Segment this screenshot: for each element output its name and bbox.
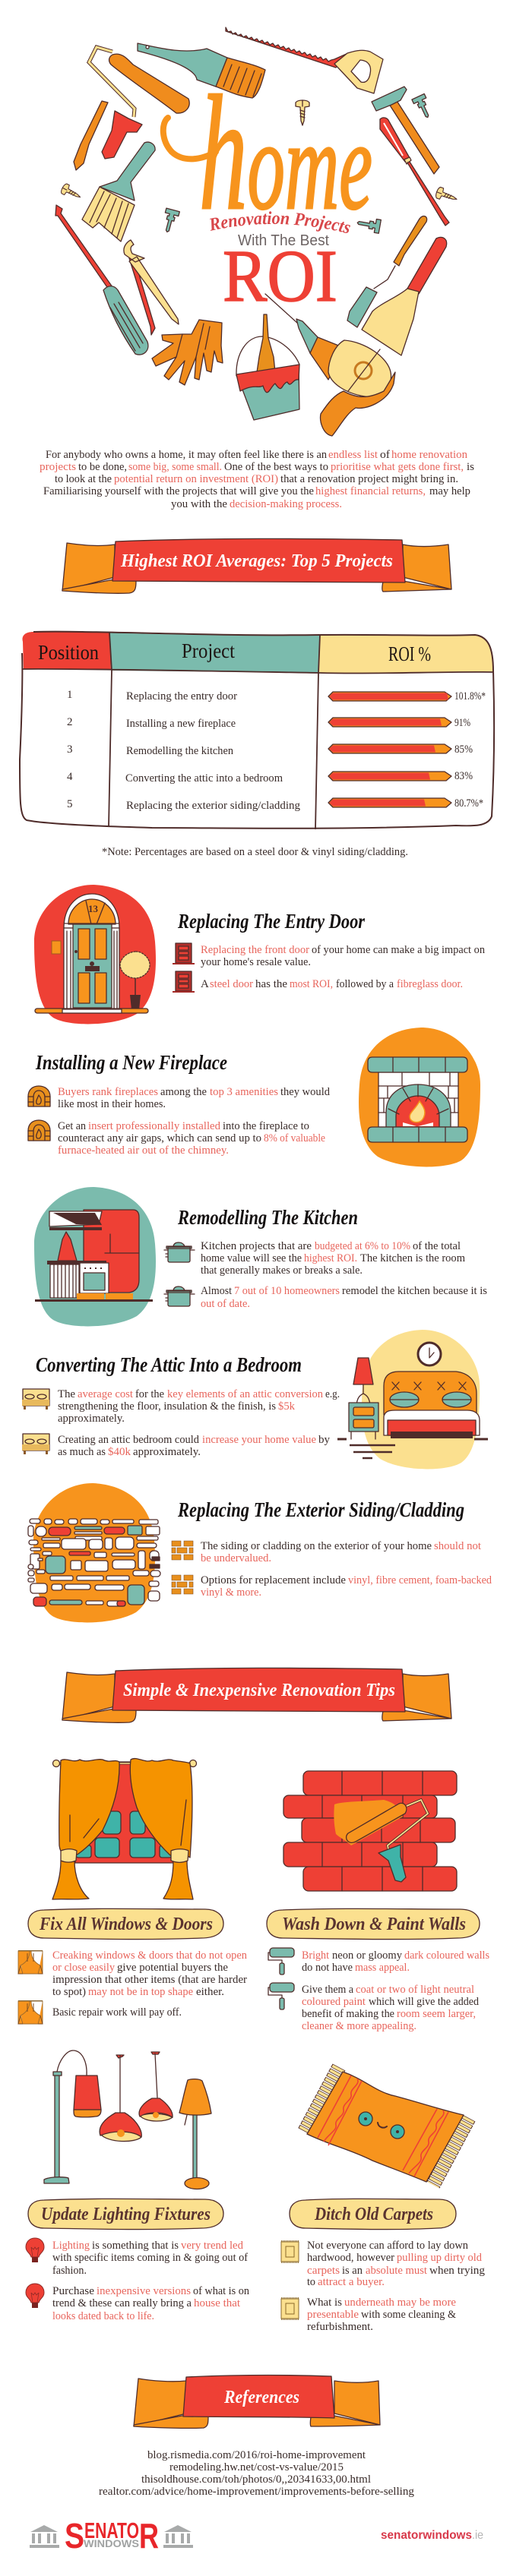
bullet text: increase your home value xyxy=(202,1434,316,1446)
ROI values xyxy=(454,690,486,810)
bullet text: give potential buyers the xyxy=(117,1962,228,1974)
project names: Replacing the entry door xyxy=(126,690,237,702)
title word: home: home xyxy=(199,62,372,244)
bullet text: Kitchen projects that are xyxy=(201,1240,312,1252)
bullet text: mass appeal. xyxy=(355,1962,410,1974)
project names: Replacing the exterior siding/cladding xyxy=(126,800,300,812)
heading: Installing a New Fireplace xyxy=(35,1051,227,1074)
bullet text: presentable xyxy=(307,2309,359,2321)
table footnote: *Note: Percentages are based on a steel door & vinyl siding/cladding. xyxy=(102,846,408,858)
bullet text xyxy=(58,1086,330,1110)
bullet text: is something that is xyxy=(92,2240,179,2252)
bullet text: to xyxy=(307,2276,315,2288)
bullet text: average cost xyxy=(78,1388,134,1400)
pill heading: Update Lighting Fixtures xyxy=(41,2205,211,2224)
references list: remodeling.hw.net/cost-vs-value/2015 xyxy=(169,2461,344,2473)
icon: paint bucket xyxy=(236,314,299,420)
table headings: Position xyxy=(38,641,99,664)
bullet text: The xyxy=(58,1388,75,1400)
bullet text: either. xyxy=(196,1986,224,1998)
bullet text: fibreglass door. xyxy=(397,978,463,990)
bullet text: do not have xyxy=(302,1962,353,1974)
intro text block: decision-making process. xyxy=(230,498,342,510)
icon: curtain xyxy=(18,1950,43,1974)
bullet text: they would xyxy=(280,1086,330,1098)
bullet text: Bright xyxy=(302,1949,330,1962)
bullet text: among the xyxy=(160,1086,207,1098)
bullet text: is an xyxy=(342,2265,363,2277)
icon: fireplace xyxy=(28,1120,50,1141)
bullet text: Purchase xyxy=(52,2285,94,2297)
bullet text: Creating an attic bedroom could xyxy=(58,1434,199,1446)
bullet text: top 3 amenities xyxy=(210,1086,278,1098)
position numbers: 4 xyxy=(67,771,73,783)
position numbers: 1 xyxy=(67,689,73,701)
project names: Converting the attic into a bedroom xyxy=(125,772,283,784)
intro text block xyxy=(40,449,474,510)
bullet text: 8% of valuable xyxy=(264,1132,325,1144)
bullet text: with some cleaning & xyxy=(361,2309,456,2321)
icon: heat gun xyxy=(265,294,395,436)
table headings xyxy=(38,639,431,665)
bullet text: refurbishment. xyxy=(307,2321,373,2333)
logo: Senator Windows: S xyxy=(65,2516,84,2555)
bullet text: underneath may be more xyxy=(344,2297,456,2309)
intro text block: to be done, xyxy=(78,461,127,473)
project names: Remodelling the kitchen xyxy=(126,745,233,757)
illustration: carpet xyxy=(304,2067,469,2185)
intro text block: highest financial returns, xyxy=(315,485,426,497)
illustration: curtains xyxy=(52,1759,196,1899)
bullet text: house that xyxy=(194,2297,241,2309)
banner: Highest ROI Averages xyxy=(62,538,451,593)
bullet text: or close easily xyxy=(52,1962,115,1974)
table headings: Project xyxy=(182,639,235,662)
icon: pot xyxy=(164,1286,195,1306)
bullet text: to spot) xyxy=(52,1986,86,1998)
references list: blog.rismedia.com/2016/roi-home-improvement xyxy=(147,2449,366,2461)
bullet text: furnace-heated air out of the chimney. xyxy=(58,1144,229,1157)
position numbers: 2 xyxy=(67,716,73,728)
intro text block: Familiarising yourself with the projects that will give you the xyxy=(43,485,314,497)
intro text block: home renovation xyxy=(391,449,467,461)
bullet text: room seem larger, xyxy=(397,2008,476,2020)
intro text block: is xyxy=(467,461,474,473)
bullet text: which will give the added xyxy=(369,1996,479,2008)
bullet text xyxy=(201,944,485,968)
intro text block: some big, some small. xyxy=(128,461,222,473)
bullet text: neon or gloomy xyxy=(332,1949,402,1962)
icon: drill bit xyxy=(74,101,108,170)
bullet text: of what is on xyxy=(193,2285,249,2297)
intro text block: of xyxy=(380,449,390,461)
pill heading: Fix All Windows & Doors xyxy=(39,1915,213,1934)
title word: ROI: ROI xyxy=(223,235,337,317)
bullet text: Options for replacement include xyxy=(201,1574,346,1586)
icon: pot xyxy=(164,1242,195,1262)
project names: Installing a new fireplace xyxy=(126,718,236,730)
icon: rug xyxy=(281,2241,299,2262)
intro text block: that a renovation project might bring in. xyxy=(280,473,458,485)
project names xyxy=(125,690,300,812)
header tools illustration xyxy=(55,27,459,436)
bullet text: as much as xyxy=(58,1446,106,1458)
illustration: red door xyxy=(34,885,156,1024)
references list: realtor.com/advice/home-improvement/improvements-before-selling xyxy=(99,2486,414,2498)
bullet text: attract a buyer. xyxy=(318,2276,385,2288)
bullet text: be undervalued. xyxy=(201,1552,271,1564)
bullet text: 7 out of 10 homeowners xyxy=(234,1285,340,1297)
icon: screwdriver left xyxy=(55,205,148,355)
pill heading xyxy=(28,1908,223,1940)
logo: Senator Windows: R xyxy=(139,2516,159,2555)
bullet text xyxy=(52,1949,247,1998)
website link: .ie xyxy=(472,2529,483,2542)
bullet text: steel door xyxy=(210,978,253,990)
bullet text xyxy=(307,2297,456,2333)
bullet text: Get an xyxy=(58,1120,86,1132)
intro text block: may help xyxy=(429,485,470,497)
icon: bricks xyxy=(172,1575,193,1594)
bullet text: carpets xyxy=(307,2265,340,2277)
icon: roller xyxy=(268,1983,294,2009)
icon: chisel xyxy=(347,216,427,327)
bullet text: Not everyone can afford to lay down xyxy=(307,2240,468,2252)
bullet text: should not xyxy=(434,1540,482,1552)
icon: curtain xyxy=(18,2000,43,2024)
intro text block: you with the xyxy=(171,498,227,510)
bullet text: of your home can make a big impact on xyxy=(312,944,485,956)
bullet text: Almost xyxy=(201,1285,233,1297)
bullet text: $5k xyxy=(278,1400,295,1413)
icon: gloves xyxy=(152,320,223,385)
heading: Remodelling The Kitchen xyxy=(177,1206,358,1229)
bullet text: by xyxy=(318,1434,330,1446)
bullet text: home value will see the xyxy=(201,1252,302,1264)
bullet text xyxy=(201,1285,487,1310)
icon: door xyxy=(173,943,195,964)
heading: Converting The Attic Into a Bedroom xyxy=(36,1353,302,1376)
bullet text: A xyxy=(201,978,209,990)
table headings: ROI % xyxy=(388,642,431,665)
icon: red screwdriver xyxy=(380,118,449,226)
bullet text xyxy=(302,1984,479,2032)
title line: Renovation Projects: Renovation Projects xyxy=(210,211,351,233)
icon: fireplace xyxy=(28,1086,50,1106)
illustration: kitchen xyxy=(34,1187,156,1326)
heading: Replacing The Entry Door xyxy=(177,910,365,933)
bullet text: e.g. xyxy=(325,1388,340,1400)
bullet text: looks dated back to life. xyxy=(52,2310,154,2322)
bullet text: coloured paint xyxy=(302,1996,366,2008)
bullet text xyxy=(201,978,463,990)
bullet text xyxy=(201,1240,465,1277)
bullet text: key elements of an attic conversion xyxy=(167,1388,323,1400)
intro text block: prioritise what gets done first, xyxy=(331,461,464,473)
icon: door xyxy=(173,971,195,993)
title line: With The Best: With The Best xyxy=(238,232,329,249)
ROI values: 85% xyxy=(454,743,473,756)
ROI values: 101.8%* xyxy=(454,690,486,702)
intro text block: potential return on investment (ROI) xyxy=(114,473,278,485)
logo: Senator Windows: ENATO xyxy=(84,2519,139,2543)
bullet text xyxy=(302,1949,489,1974)
title word: home xyxy=(163,62,372,244)
bullet text xyxy=(201,1574,492,1599)
icon: roller xyxy=(268,1948,294,1975)
panel: Fix All Windows & Doors xyxy=(18,1759,247,2024)
illustration: bedroom xyxy=(337,1330,488,1469)
references list xyxy=(99,2449,414,2498)
illustration: fireplace xyxy=(359,1028,480,1166)
icon: bed xyxy=(22,1389,49,1410)
title xyxy=(160,62,372,317)
bullet text: vinyl, fibre cement, foam-backed xyxy=(348,1574,492,1586)
icon: bulb xyxy=(26,2238,44,2262)
intro text block: endless list xyxy=(328,449,378,461)
bullet text: for the xyxy=(135,1388,164,1400)
banner: Highest ROI Averages: Highest ROI Averages: Top 5 Projects xyxy=(120,551,393,571)
bullet text xyxy=(58,1388,340,1425)
panel: Installing a New Fireplace xyxy=(28,1028,480,1166)
heading: Replacing The Exterior Siding/Cladding xyxy=(177,1498,464,1521)
bullet text xyxy=(201,1540,482,1564)
banner: Simple & Inexpensive Renovation Tips: Simple & Inexpensive Renovation Tips xyxy=(123,1681,395,1700)
bullet text: budgeted at 6% to 10% xyxy=(315,1240,410,1252)
panel: Ditch Old Carpets xyxy=(281,2067,485,2333)
bullet text: absolute must xyxy=(366,2265,428,2277)
ROI values: 80.7%* xyxy=(454,797,483,810)
banner: References xyxy=(134,2376,380,2428)
bullet text: may not be in top shape xyxy=(88,1986,193,1998)
icon: rug xyxy=(281,2298,299,2319)
bullet text xyxy=(52,2285,249,2322)
icon: wide brush xyxy=(82,142,155,242)
position numbers: 3 xyxy=(67,743,73,756)
pill heading xyxy=(267,1908,480,1940)
bullet text: fashion. xyxy=(52,2265,87,2277)
intro text block: For anybody who owns a home, it may often feel like there is an xyxy=(46,449,327,461)
panel: Converting The Attic xyxy=(22,1330,488,1469)
bullet text: inexpensive versions xyxy=(97,2285,191,2297)
bar chart: ROI percentages xyxy=(328,692,451,807)
logo: Senator Windows: WINDOWS xyxy=(84,2537,139,2549)
bullet text xyxy=(307,2240,485,2288)
bullet text: when trying xyxy=(429,2265,485,2277)
bullet text: Replacing the front door xyxy=(201,944,309,956)
bullet text: The siding or cladding on the exterior of your home xyxy=(201,1540,432,1552)
icon: paint brush top xyxy=(138,43,265,98)
bullet text: pulling up dirty old xyxy=(397,2252,482,2264)
bullet text: Buyers rank fireplaces xyxy=(58,1086,158,1098)
bullet text: What is xyxy=(307,2297,342,2309)
bullet text: counteract any air gaps, which can send up to xyxy=(58,1132,261,1144)
panel: Wash Down & Paint Walls xyxy=(267,1771,489,2032)
illustration: lamps xyxy=(44,2050,211,2189)
bullet text: $40k xyxy=(108,1446,131,1458)
bullet text: approximately. xyxy=(58,1413,125,1425)
position numbers: 5 xyxy=(67,798,73,810)
banner: Simple & Inexpensive Renovation Tips xyxy=(62,1668,451,1722)
bullet text: remodel the kitchen because it is xyxy=(342,1285,487,1297)
intro text block: to look at the xyxy=(55,473,112,485)
ROI values: 83% xyxy=(454,770,473,782)
bullet text: that generally makes or breaks a sale. xyxy=(201,1264,363,1277)
bullet text: dark coloured walls xyxy=(404,1949,489,1962)
references list: thisoldhouse.com/toh/photos/0,,20341633,00.html xyxy=(141,2473,371,2486)
intro text block: One of the best ways to xyxy=(224,461,328,473)
bullet text: into the fireplace to xyxy=(223,1120,309,1132)
pill heading: Wash Down & Paint Walls xyxy=(282,1915,466,1934)
panel: Remodelling The Kitchen xyxy=(34,1187,487,1326)
bullet text: trend & these can really bring a xyxy=(52,2297,192,2309)
panel: Replacing The Entry Door xyxy=(34,885,485,1024)
bullet text: out of date. xyxy=(201,1298,250,1310)
illustration: stone wall xyxy=(28,1483,160,1622)
bullet text: highest ROI. xyxy=(304,1252,357,1264)
bullet text: The kitchen is the room xyxy=(360,1252,465,1264)
illustration: red door: 13 xyxy=(88,903,99,914)
website link: senatorwindows xyxy=(381,2529,472,2542)
pill heading: Ditch Old Carpets xyxy=(314,2205,433,2224)
icon: paint roller xyxy=(89,47,189,159)
bullet text: Basic repair work will pay off. xyxy=(52,2006,182,2019)
bullet text xyxy=(52,2240,248,2277)
bullet text: like most in their homes. xyxy=(58,1098,166,1110)
intro text block: projects xyxy=(40,461,76,473)
icon: bricks xyxy=(172,1541,193,1560)
bullet text: approximately. xyxy=(133,1446,201,1458)
icon: screws and nails scattered xyxy=(160,94,459,234)
bullet text: coat or two of light neutral xyxy=(356,1984,474,1996)
bullet text: vinyl & more. xyxy=(201,1586,261,1599)
bullet text: very trend led xyxy=(181,2240,243,2252)
bullet text: most ROI, xyxy=(290,978,333,990)
panel: Replacing The Exterior Siding xyxy=(28,1483,492,1622)
bullet text xyxy=(58,1434,330,1458)
bullet text: with specific items coming in & going out of xyxy=(52,2252,248,2264)
bullet text: strengthening the floor, insulation & the finish, is xyxy=(58,1400,276,1413)
illustration: brick wall and roller xyxy=(283,1771,457,1891)
position numbers xyxy=(67,689,73,810)
bullet text: hardwood, however xyxy=(307,2252,394,2264)
bullet text: Lighting xyxy=(52,2240,90,2252)
bullet text: benefit of making the xyxy=(302,2008,394,2020)
bullet text: Give them a xyxy=(302,1984,353,1996)
panel: Update Lighting Fixtures xyxy=(26,2050,249,2322)
bullet text: cleaner & more appealing. xyxy=(302,2020,416,2032)
bullet text: of the total xyxy=(413,1240,461,1252)
bullet text xyxy=(58,1120,325,1157)
icon: bed xyxy=(22,1434,49,1454)
bullet text: followed by a xyxy=(336,978,394,990)
panel: ROI table xyxy=(20,631,494,829)
pill heading xyxy=(290,2199,456,2230)
table header cells xyxy=(20,631,494,829)
bullet text: has the xyxy=(255,978,287,990)
bullet text: your home's resale value. xyxy=(201,956,311,968)
ROI values: 91% xyxy=(454,717,470,729)
banner: References: References xyxy=(223,2388,299,2407)
icon: hammer xyxy=(372,87,439,174)
bullet text: impression that other items (that are harder xyxy=(52,1974,247,1986)
bullet text: Creaking windows & doors that do not open xyxy=(52,1949,247,1962)
logo: Senator Windows xyxy=(30,2516,193,2555)
icon: scraper xyxy=(362,237,447,355)
icon: screw left xyxy=(60,183,83,202)
bullet text: insert professionally installed xyxy=(88,1120,220,1132)
icon: saw xyxy=(226,27,383,93)
icon: pliers xyxy=(124,240,179,335)
pill heading xyxy=(28,2199,223,2230)
icon: bulb xyxy=(26,2284,44,2308)
